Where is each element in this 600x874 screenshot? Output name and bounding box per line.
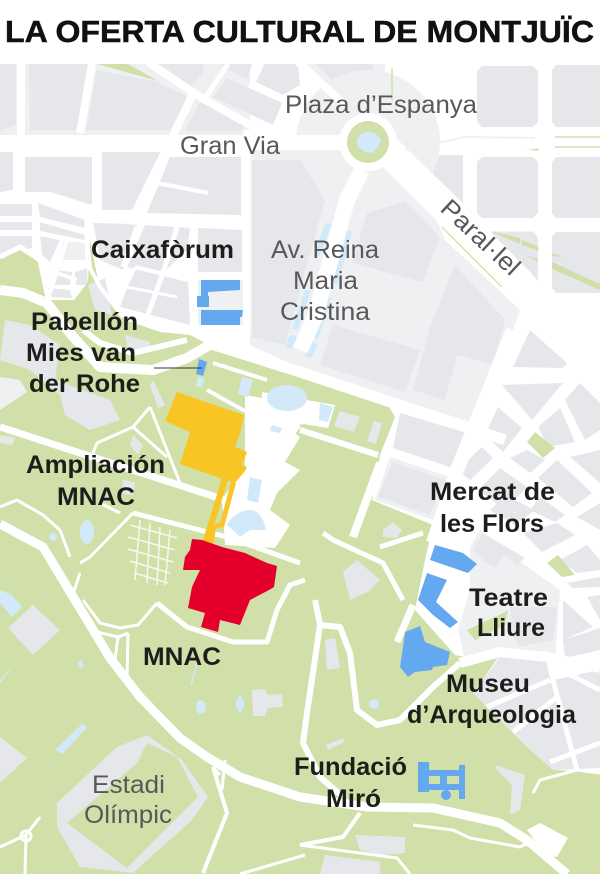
venue labels: Lliure — [477, 614, 545, 642]
venue labels: der Rohe — [29, 370, 140, 398]
venue labels: MNAC — [143, 643, 221, 671]
venue labels: Mies van — [26, 339, 136, 367]
Museu d'Arqueologia building — [400, 626, 450, 677]
Fundació Miró building — [418, 762, 465, 800]
title: LA OFERTA CULTURAL DE MONTJUÏC — [5, 14, 594, 49]
venue labels: Pabellón — [31, 308, 138, 336]
Pavelló Mies van der Rohe building — [196, 359, 207, 376]
Teatre Lliure building — [418, 573, 458, 628]
geographic labels: Av. Reina — [271, 236, 379, 264]
panel: terraces — [222, 392, 386, 548]
geographic labels: Gran Via — [180, 132, 280, 160]
geographic labels: Cristina — [280, 298, 370, 326]
venue labels: d’Arqueologia — [407, 701, 577, 729]
MNAC building — [183, 539, 277, 632]
venue labels — [26, 236, 577, 813]
venue labels: Miró — [326, 785, 381, 813]
geographic labels — [84, 91, 526, 829]
geographic labels: Paral·lel — [435, 194, 526, 281]
venue labels: Fundació — [294, 753, 407, 781]
panel: water features — [0, 223, 379, 754]
Caixafòrum south wing — [201, 310, 243, 325]
geographic labels: Estadi — [92, 771, 165, 799]
Caixafòrum building — [197, 280, 240, 307]
geographic labels: Maria — [293, 267, 358, 295]
venue labels: MNAC — [57, 483, 135, 511]
venue labels: les Flors — [440, 510, 544, 538]
venue labels: Ampliación — [26, 451, 165, 479]
panel: buildings on hill — [0, 278, 525, 874]
venue labels: Mercat de — [430, 478, 555, 506]
geographic labels: Plaza d’Espanya — [285, 91, 477, 119]
plaza d'Espanya roundabout — [339, 113, 397, 171]
leader line — [154, 367, 202, 369]
panel: parking grid — [128, 520, 177, 585]
Ampliación MNAC building — [165, 392, 247, 547]
venue labels: Museu — [446, 670, 530, 698]
venue labels: Teatre — [469, 584, 548, 612]
Mercat de les Flors building — [430, 545, 477, 573]
geographic labels: Olímpic — [84, 801, 172, 829]
venue labels: Caixafòrum — [91, 236, 234, 264]
